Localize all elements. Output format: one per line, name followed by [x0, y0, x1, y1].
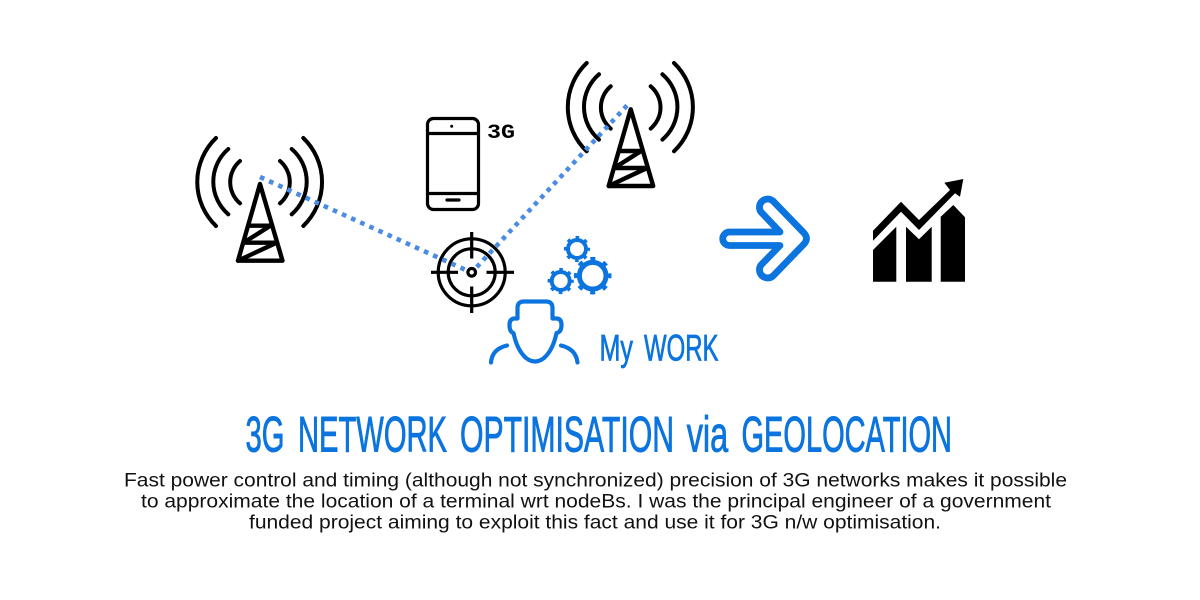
chart trend arrow — [873, 179, 963, 241]
title: OPTIMISATION — [460, 407, 674, 463]
label: My WORK: My — [600, 328, 633, 368]
title: 3G — [246, 407, 284, 463]
gear: bottom — [549, 269, 572, 293]
title: GEOLOCATION — [742, 407, 952, 463]
icon: smartphone — [428, 118, 478, 210]
arrow: blue outlined — [723, 199, 806, 278]
title: via — [687, 407, 728, 463]
chart bars — [873, 205, 965, 282]
gear: large — [576, 259, 610, 293]
dotted link: left tower to target — [260, 177, 468, 271]
label: My WORK — [600, 328, 719, 368]
icon: growth chart — [873, 179, 965, 282]
label: My WORK: WORK — [644, 328, 719, 368]
title: NETWORK — [298, 407, 447, 463]
icon: gears — [549, 237, 610, 293]
body paragraph — [124, 470, 1067, 533]
label: 3G: 3G — [487, 122, 515, 145]
icon: right radio tower — [568, 63, 693, 186]
icon: target crosshair — [431, 232, 514, 313]
icon: engineer person — [491, 302, 578, 362]
gear: top — [565, 237, 589, 261]
dotted link: right tower to target — [474, 106, 627, 270]
icon: left radio tower — [197, 138, 322, 261]
paragraph line 3: funded project aiming to exploit this fact and use it for 3G n/w optimisation. — [249, 511, 941, 533]
paragraph line 1: Fast power control and timing (although not synchronized) precision of 3G networks makes it possible — [124, 470, 1067, 492]
paragraph line 2: to approximate the location of a terminal wrt nodeBs. I was the principal engineer of a government — [141, 491, 1052, 513]
title — [246, 407, 952, 463]
